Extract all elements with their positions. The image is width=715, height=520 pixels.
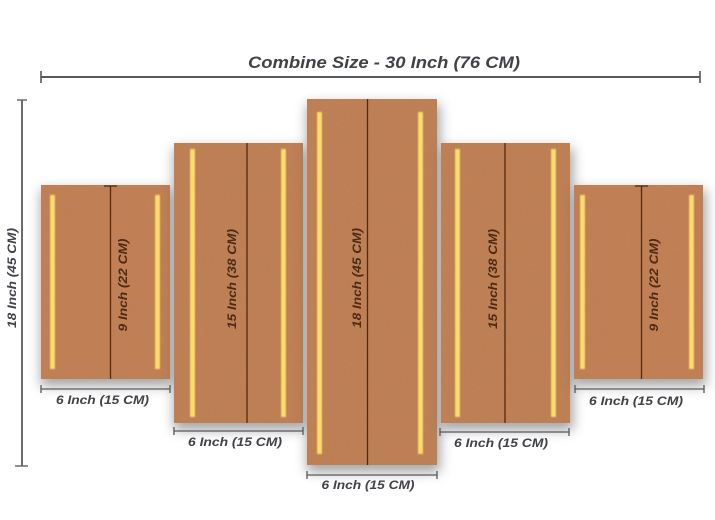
height label: 9 Inch (22 CM) — [647, 238, 661, 332]
arrow: overall height — [15, 100, 28, 466]
panel 4 — [441, 143, 573, 430]
width dimension 3: 6 Inch (15 CM) — [322, 478, 414, 492]
width dimension 4: 6 Inch (15 CM) — [454, 436, 548, 450]
width dimension 2: 6 Inch (15 CM) — [188, 435, 282, 449]
width dimension 1: 6 Inch (15 CM) — [56, 393, 149, 407]
height line — [504, 143, 506, 423]
width dimension 1 — [41, 385, 170, 407]
panel 2 — [174, 143, 306, 430]
light strip left — [317, 112, 322, 454]
width dimension 5 — [575, 385, 704, 408]
width dimension 2 — [174, 427, 303, 449]
light strip right — [281, 149, 286, 417]
height label: 18 Inch (45 CM) — [350, 228, 364, 328]
light strip left — [455, 149, 460, 417]
light strip right — [418, 112, 423, 454]
height label: 15 Inch (38 CM) — [486, 229, 500, 329]
height line — [104, 186, 117, 379]
light strip left — [580, 195, 585, 369]
light strip left — [190, 149, 195, 417]
height label: 9 Inch (22 CM) — [116, 238, 130, 332]
panel 1 — [41, 185, 173, 386]
height line — [635, 186, 648, 379]
light strip right — [551, 149, 556, 417]
width dimension 4 — [440, 428, 569, 450]
width dimension 5: 6 Inch (15 CM) — [589, 394, 683, 408]
panel 5 — [574, 185, 706, 386]
height line — [366, 99, 368, 465]
label: overall height: 18 Inch (45 CM) — [5, 228, 19, 328]
title: combined size: Combine Size - 30 Inch (76 CM) — [248, 54, 521, 72]
panel 3 — [307, 99, 440, 472]
light strip right — [155, 195, 160, 369]
light strip right — [689, 195, 694, 369]
light strip left — [50, 195, 55, 369]
height line — [246, 143, 248, 423]
height label: 15 Inch (38 CM) — [225, 229, 239, 329]
width dimension 3 — [307, 471, 437, 492]
arrow: overall width — [41, 71, 700, 83]
